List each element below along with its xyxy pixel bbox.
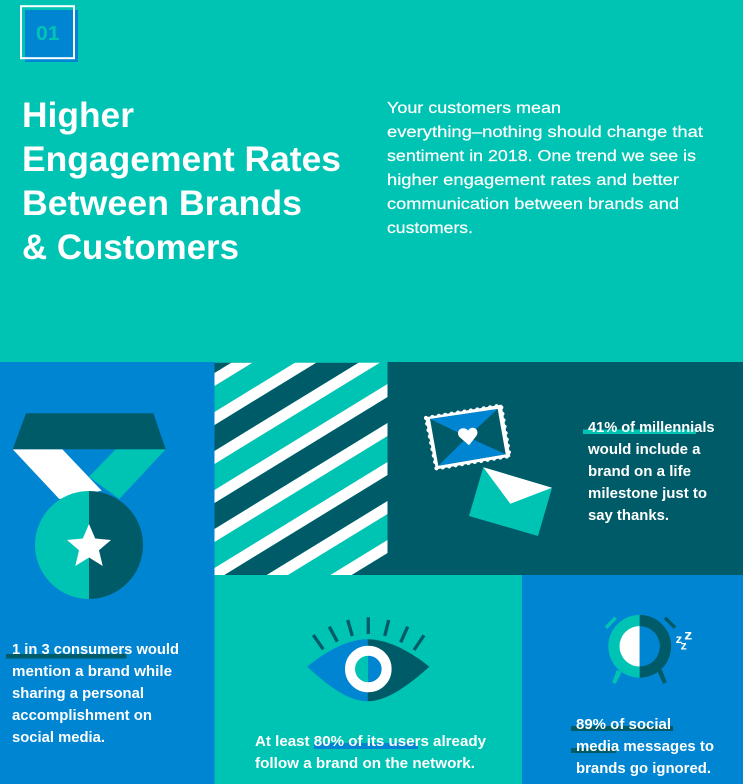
icon: alarm clock: z — [684, 626, 692, 642]
text: 89% of social: media messages to — [576, 739, 714, 755]
text: 41% of millennials — [587, 420, 714, 524]
title: Engagement Rates — [22, 140, 341, 179]
text: 89% of social — [576, 717, 714, 777]
text: 80% of its users — [255, 734, 486, 772]
text: 41% of millennials: milestone just to — [588, 486, 707, 502]
intro text block: communication between brands and — [387, 196, 679, 213]
highlight: 1 in 3 consumers — [6, 654, 126, 658]
title: Between Brands — [22, 184, 302, 223]
icon: medal — [13, 413, 166, 599]
intro text block: Your customers mean — [387, 100, 561, 117]
intro text block — [387, 100, 704, 237]
icon: alarm clock: z — [681, 638, 687, 652]
badge: section number 01 — [21, 6, 78, 62]
panel: millennials statistic — [388, 362, 743, 575]
text: 1 in 3 consumers: social media. — [12, 730, 105, 746]
text: 1 in 3 consumers: accomplishment on — [12, 708, 152, 724]
icon: stamp with heart — [426, 406, 510, 468]
text: 80% of its users: At least 80% of its users already — [255, 734, 486, 750]
icon: eye — [307, 617, 429, 701]
badge: section number 01: 01 — [36, 22, 60, 45]
text: 89% of social: 89% of social — [576, 717, 671, 733]
text: 41% of millennials: say thanks. — [588, 508, 669, 524]
text: 80% of its users: follow a brand on the network. — [255, 756, 475, 772]
text: 1 in 3 consumers: 1 in 3 consumers would — [12, 642, 179, 658]
highlight: 80% of its users — [314, 743, 418, 749]
intro text block: customers. — [387, 220, 473, 237]
text: 89% of social: brands go ignored. — [576, 761, 711, 777]
text: 41% of millennials: would include a — [587, 442, 701, 458]
text: 41% of millennials: 41% of millennials — [588, 420, 714, 436]
icon: alarm clock: z — [676, 632, 682, 646]
text: 41% of millennials: brand on a life — [588, 464, 691, 480]
intro text block: sentiment in 2018. One trend we see is — [387, 148, 696, 165]
title: Higher — [22, 96, 134, 135]
panel: diagonal stripes — [214, 362, 388, 575]
icon: envelope — [469, 467, 552, 536]
text: 1 in 3 consumers: mention a brand while — [12, 664, 172, 680]
title — [22, 96, 341, 267]
title: & Customers — [22, 228, 239, 267]
highlight: 41% of millennials — [583, 430, 696, 434]
text: 1 in 3 consumers: sharing a personal — [12, 686, 144, 702]
text: 1 in 3 consumers — [12, 642, 179, 746]
panel: alarm clock statistic — [522, 575, 743, 784]
intro text block: higher engagement rates and better — [387, 172, 679, 189]
icon: alarm clock — [606, 614, 692, 684]
highlight: media — [571, 748, 616, 753]
highlight: 89% of social — [571, 726, 673, 731]
panel: medal statistic — [0, 362, 214, 784]
intro text block: everything–nothing should change that — [387, 124, 704, 141]
panel: eye statistic — [255, 617, 486, 768]
